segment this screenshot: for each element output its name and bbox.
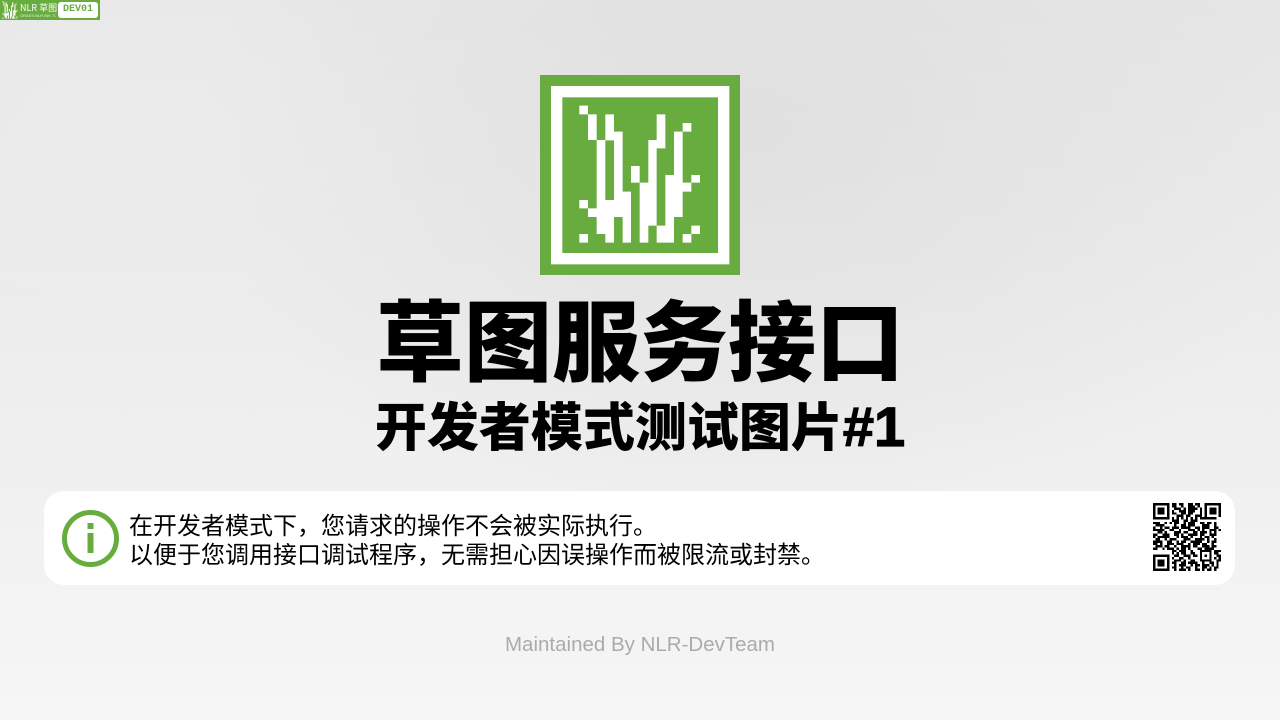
- badge label: NLR 草图: NLR 草图: [20, 1, 57, 14]
- badge pill: DEV01: [58, 2, 98, 18]
- title: 草图服务接口: [376, 273, 904, 400]
- notice text: [129, 506, 825, 570]
- icon: QR code: [1153, 503, 1221, 571]
- badge pill: DEV01: DEV01: [63, 4, 93, 15]
- subtitle: 开发者模式测试图片#1: [375, 386, 905, 461]
- footer: maintained by: Maintained By NLR-DevTeam: [505, 633, 775, 656]
- icon: mini grass logo: [2, 1, 18, 19]
- badge: NLR DEV01: [0, 0, 100, 20]
- icon: grass logo: [540, 75, 740, 275]
- panel: notice: [44, 491, 1235, 585]
- icon: info circle: [62, 510, 119, 567]
- notice text: 在开发者模式下，您请求的操作不会被实际执行。: [129, 506, 657, 541]
- notice text: 以便于您调用接口调试程序，无需担心因误操作而被限流或封禁。: [129, 535, 825, 570]
